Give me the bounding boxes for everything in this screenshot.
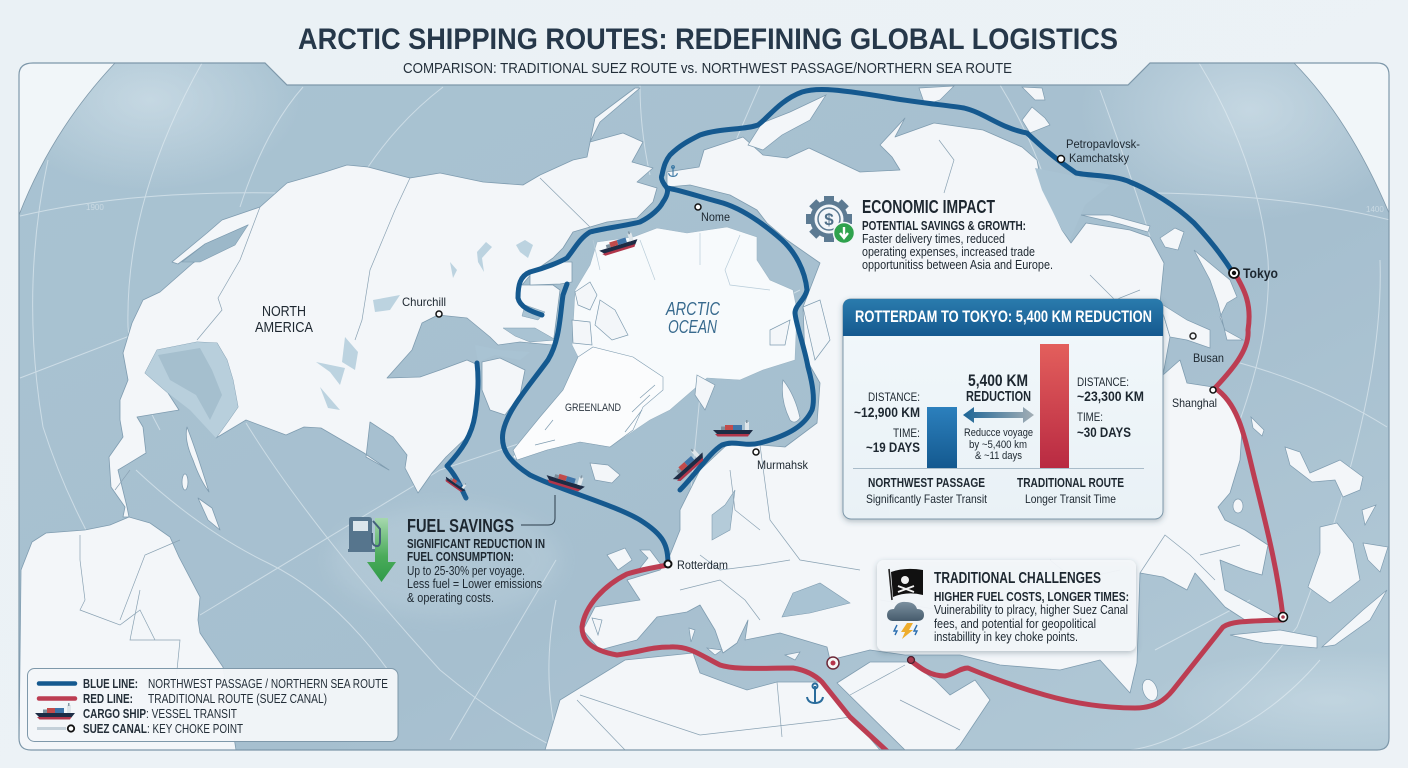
traditional route stats: ~23,300 KM (1077, 388, 1144, 404)
marker: Persian Gulf (908, 656, 914, 664)
bar caption: Northwest Passage: Significantly Faster Transit (866, 492, 988, 506)
route: traditional Suez (red) (582, 272, 1283, 752)
reduction callout: & ~11 days (975, 450, 1022, 462)
label: Petropavlovsk-Kamchatsky: Kamchatsky (1069, 151, 1129, 165)
map faint latitude labels (86, 203, 1384, 214)
legend: blue line: NORTHWEST PASSAGE / NORTHERN SEA ROUTE (148, 677, 388, 691)
country borders (80, 140, 1240, 750)
bar caption: Northwest Passage: NORTHWEST PASSAGE (868, 476, 985, 490)
bar caption: traditional route (1017, 476, 1124, 506)
bar caption: traditional route: TRADITIONAL ROUTE (1017, 476, 1124, 490)
icon: Suez anchor (807, 684, 823, 703)
text block: Less fuel = Lower emissions (407, 577, 542, 591)
traditional route stats: DISTANCE: (1077, 375, 1129, 389)
land: Arctic ice and Greenland (513, 227, 797, 460)
legend: red line (39, 692, 327, 706)
legend: cargo ship (35, 703, 237, 721)
text block: Vuinerability to plracy, higher Suez Canal (934, 603, 1128, 617)
reduction callout: REDUCTION (966, 388, 1031, 405)
heading: ECONOMIC IMPACT (862, 197, 995, 217)
map faint latitude labels: 1900 (86, 203, 104, 212)
legend: red line: TRADITIONAL ROUTE (SUEZ CANAL) (148, 692, 327, 706)
heading: TRADITIONAL CHALLENGES (934, 570, 1101, 587)
label: Churchill: Churchill (402, 295, 446, 309)
text block: SIGNIFICANT REDUCTION IN (407, 536, 545, 551)
reduction callout: Reducce voyage (964, 427, 1033, 439)
label: Arctic Ocean: ARCTIC (665, 299, 721, 319)
label: Busan: Busan (1193, 351, 1224, 365)
text block: fees, and potential for geopolitical (934, 617, 1096, 631)
legend: Suez Canal (37, 722, 243, 736)
land: Arctic islands (572, 86, 1388, 703)
icon: gear with dollar (806, 196, 854, 244)
label: North America: AMERICA (255, 320, 313, 336)
panel: Rotterdam to Tokyo comparison (843, 299, 1163, 519)
label: Arctic Ocean (665, 299, 721, 337)
label: North America (255, 304, 313, 336)
panel: fuel savings (330, 495, 560, 615)
text block: operating expenses, increased trade (862, 245, 1035, 259)
label: Shanghai (1172, 387, 1217, 410)
land: North America (109, 88, 657, 530)
text block (934, 589, 1129, 644)
Northwest Passage stats: TIME: (893, 426, 920, 440)
bar: Northwest Passage (927, 407, 957, 468)
panel header (843, 299, 1163, 336)
panel: traditional challenges (877, 560, 1136, 651)
text block: HIGHER FUEL COSTS, LONGER TIMES: (934, 589, 1129, 604)
text block: opportunitiss between Asia and Europe. (862, 258, 1053, 272)
route: Northwest Passage / Northern Sea Route (blue) (447, 89, 1233, 565)
label: Shanghai: Shanghal (1172, 396, 1217, 410)
location labels (86, 137, 1384, 664)
label: Petropavlovsk-Kamchatsky (1058, 137, 1140, 165)
land: South America (19, 517, 236, 750)
text block: Up to 25-30% per voyage. (407, 564, 525, 578)
label: Tokyo (1229, 265, 1278, 281)
label: Petropavlovsk-Kamchatsky: Petropavlovsk- (1066, 137, 1140, 151)
label: Murmansk (753, 449, 809, 472)
icon: fuel pump and down arrow (348, 517, 396, 582)
text block: POTENTIAL SAVINGS & GROWTH: (862, 218, 1026, 233)
Northwest Passage stats (854, 390, 920, 455)
arrow: double-headed (963, 407, 1034, 423)
text block (407, 536, 545, 605)
legend: Suez Canal: SUEZ CANAL (83, 722, 147, 736)
traditional route stats: ~30 DAYS (1077, 424, 1131, 440)
bar caption: Northwest Passage (866, 476, 988, 506)
label: Tokyo: Tokyo (1243, 265, 1278, 281)
legend: Suez Canal: : KEY CHOKE POINT (147, 722, 243, 736)
label: North America: NORTH (262, 304, 306, 320)
Northwest Passage stats: DISTANCE: (868, 390, 920, 404)
label: Busan (1190, 333, 1224, 365)
water: seas and lakes (145, 168, 1110, 617)
legend: cargo ship: CARGO SHIP (83, 707, 146, 721)
icon: storm cloud (887, 602, 924, 639)
legend: cargo ship: : VESSEL TRANSIT (146, 707, 237, 721)
text block: instabillity in key choke points. (934, 630, 1078, 644)
legend: blue line (39, 677, 388, 691)
icon: Bering anchor (669, 166, 677, 176)
connector (521, 495, 555, 525)
traditional route stats (1077, 375, 1144, 440)
Northwest Passage stats: ~19 DAYS (866, 439, 920, 455)
icon: gear with dollar: $ (824, 210, 834, 229)
label: Rotterdam: Rotterdam (677, 558, 728, 572)
label: Arctic Ocean: OCEAN (668, 317, 718, 337)
text block: FUEL CONSUMPTION: (407, 549, 514, 564)
subtitle: COMPARISON: TRADITIONAL SUEZ ROUTE vs. NORTHWEST PASSAGE/NORTHERN SEA ROUTE (403, 60, 1012, 77)
reduction callout: 5,400 KM (968, 371, 1028, 390)
marker: Strait of Malacca (1278, 612, 1288, 622)
heading: FUEL SAVINGS (407, 515, 514, 536)
traditional route stats: TIME: (1077, 410, 1103, 424)
title: ARCTIC SHIPPING ROUTES: REDEFINING GLOBAL LOGISTICS (298, 23, 1118, 56)
legend: blue line: BLUE LINE: (83, 677, 138, 691)
axis line (853, 468, 1144, 470)
bar: traditional route (1040, 344, 1069, 468)
text block: & operating costs. (407, 591, 494, 605)
legend: red line: RED LINE: (83, 692, 133, 706)
Northwest Passage stats: ~12,900 KM (854, 404, 920, 420)
land: Africa and Arabia (545, 653, 990, 750)
icon: Suez target marker (827, 657, 839, 669)
bar caption: traditional route: Longer Transit Time (1025, 492, 1116, 506)
label: Nome: Nome (701, 210, 730, 224)
label: Murmansk: Murmahsk (757, 458, 809, 472)
panel header: ROTTERDAM TO TOKYO: 5,400 KM REDUCTION (855, 307, 1152, 326)
panel: economic impact (806, 196, 1053, 272)
icon: pirate flag (889, 569, 923, 600)
ship markers (444, 230, 753, 494)
reduction callout: by ~5,400 km (969, 439, 1027, 451)
label: Nome (695, 204, 730, 224)
text block (862, 218, 1053, 272)
label: Churchill (402, 295, 446, 317)
reduction callout (963, 371, 1034, 462)
text block: Faster delivery times, reduced (862, 232, 1005, 246)
map faint latitude labels: 1400 (1366, 205, 1384, 214)
land: Eurasia (583, 118, 1280, 693)
legend (28, 668, 398, 742)
label: Greenland: GREENLAND (565, 402, 621, 414)
